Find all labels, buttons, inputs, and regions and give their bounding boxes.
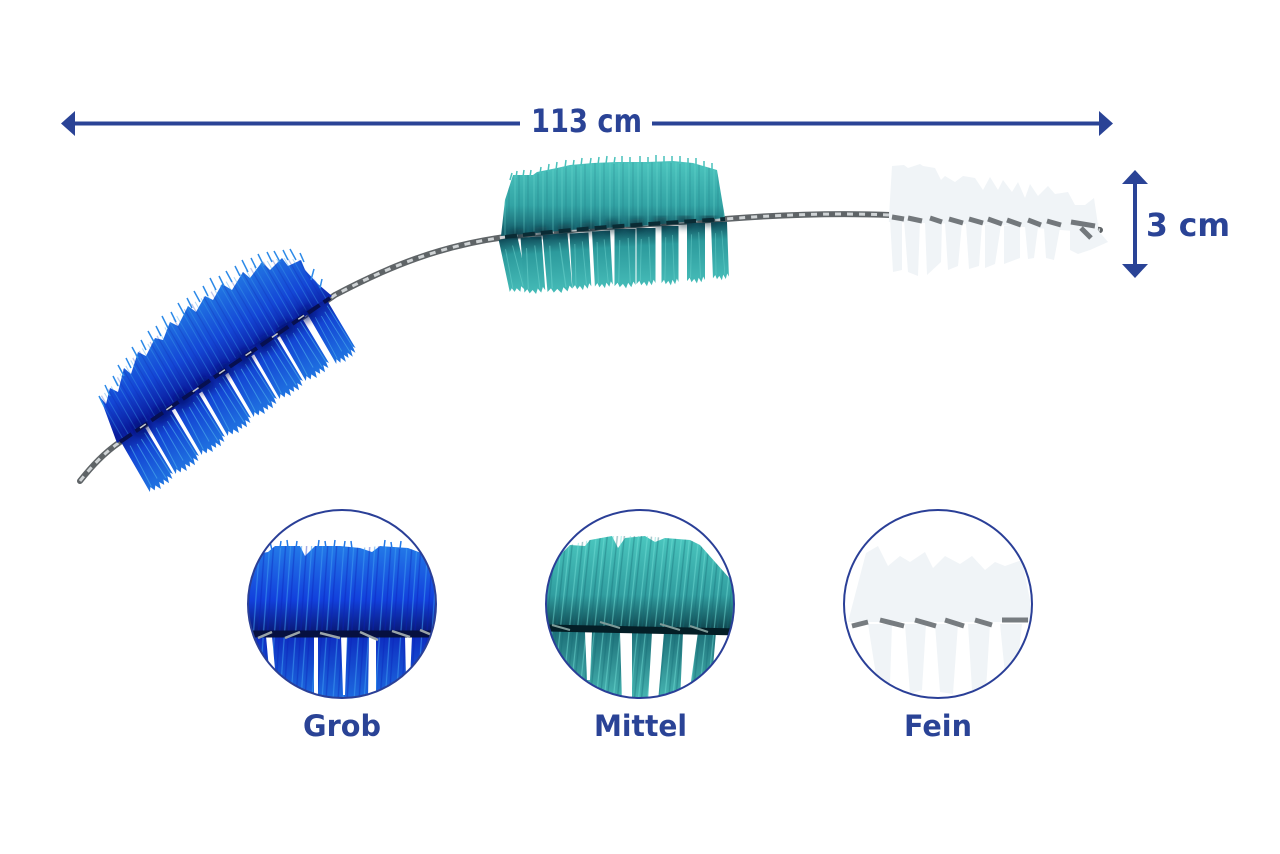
brush head: medium teal	[499, 155, 729, 295]
dimension arrow: total length 113 cm	[61, 102, 1113, 140]
Grob circle outline	[248, 510, 436, 698]
label: Grob: Grob	[303, 709, 381, 743]
teal bristle tips	[510, 155, 712, 180]
fine bristle close-up	[848, 546, 1032, 694]
medium bristle close-up	[543, 536, 740, 702]
detail circle: Grob	[245, 510, 440, 704]
white head wire segments	[892, 217, 1095, 238]
brush: twisted wire	[80, 214, 1100, 481]
detail circle: Mittel	[543, 510, 740, 702]
blue head core wire	[120, 298, 330, 442]
white lower bristle tufts	[890, 219, 1108, 276]
dimension arrow: diameter 3 cm	[1122, 170, 1230, 278]
blue lower bristle tufts	[120, 299, 359, 495]
teal head core wire	[505, 219, 725, 237]
label: Mittel: Mittel	[594, 709, 687, 743]
blue head shadow along wire	[135, 305, 320, 432]
brush head: coarse blue	[99, 249, 359, 495]
white upper bristles	[889, 164, 1098, 225]
teal upper bristles	[501, 161, 725, 236]
brush head: fine white	[889, 164, 1108, 276]
blue upper bristle streaks	[100, 258, 332, 443]
white band along wire	[889, 217, 1098, 228]
Mittel circle outline	[546, 510, 734, 698]
dimension arrow: diameter 3 cm: 3 cm	[1146, 206, 1230, 244]
infographic canvas	[61, 108, 1228, 736]
teal lower bristle tufts	[499, 222, 729, 295]
teal head shadow along wire	[510, 219, 720, 236]
detail circle: Fein	[844, 510, 1032, 698]
dimension arrow: total length 113 cm: 113 cm	[531, 102, 642, 140]
Fein circle outline	[844, 510, 1032, 698]
blue upper bristles	[100, 258, 332, 443]
label: Fein: Fein	[904, 709, 972, 743]
blue bristle tips	[99, 249, 322, 406]
teal upper bristle streaks	[501, 162, 725, 236]
coarse bristle close-up	[245, 540, 440, 704]
